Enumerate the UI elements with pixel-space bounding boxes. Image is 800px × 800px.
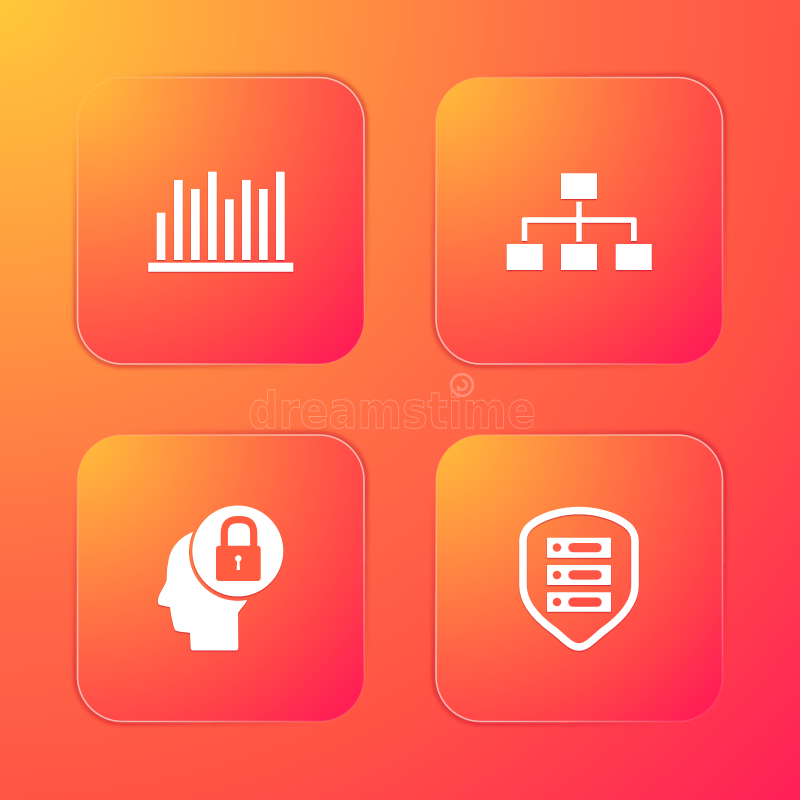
card background xyxy=(436,78,722,364)
icon: hierarchy diagram xyxy=(507,173,652,270)
head silhouette xyxy=(158,532,247,650)
icon: shield with server xyxy=(523,510,635,647)
panel: head with lock card xyxy=(76,434,365,722)
panel: bar chart card xyxy=(76,76,365,365)
icon: head with padlock xyxy=(158,506,283,650)
watermark xyxy=(248,374,536,440)
watermark text: dreamstime xyxy=(248,382,536,440)
panel: shield with server card xyxy=(435,434,724,722)
icon: bar chart xyxy=(148,172,293,272)
watermark spiral xyxy=(451,374,473,396)
card background xyxy=(78,435,364,722)
server rack units xyxy=(547,538,611,612)
padlock xyxy=(216,520,261,581)
card background xyxy=(436,435,722,722)
circle badge xyxy=(192,506,283,596)
panel: hierarchy card xyxy=(435,76,724,365)
card background xyxy=(78,78,364,364)
shield outline xyxy=(523,510,635,647)
